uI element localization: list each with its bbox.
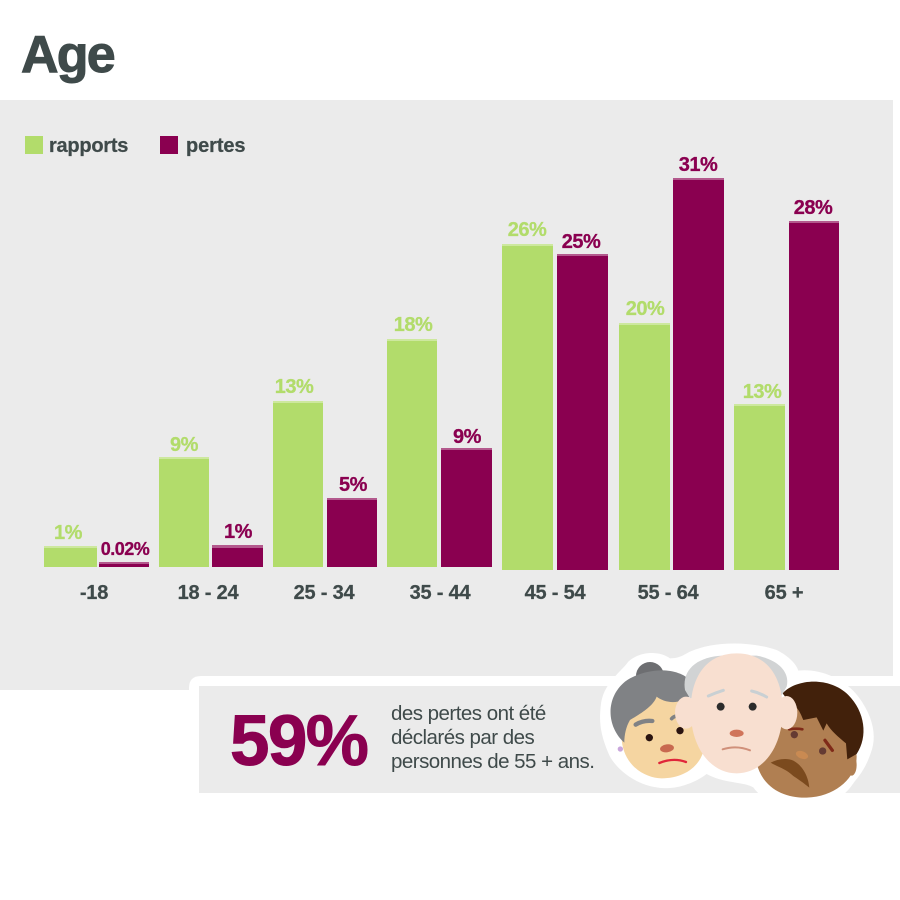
title: Age bbox=[21, 26, 115, 84]
group: 35-44: 9% bbox=[453, 426, 482, 448]
callout panel bbox=[199, 686, 900, 793]
group: -18: 0.02% bbox=[101, 539, 150, 559]
white sticker outline bbox=[600, 643, 874, 809]
dark man face bbox=[756, 682, 864, 798]
group: 65+: 65 + bbox=[765, 582, 803, 604]
group: 18-24: 18 - 24 bbox=[178, 582, 240, 604]
group: 55-64: 55 - 64 bbox=[638, 582, 700, 604]
bald man face bbox=[675, 653, 797, 773]
group: 45-54: 45 - 54 bbox=[525, 582, 587, 604]
group: 45-54 bbox=[502, 219, 608, 604]
group: 25-34: 13% bbox=[275, 376, 314, 398]
woman face bbox=[611, 662, 705, 778]
callout text: personnes de 55 + ans. bbox=[391, 750, 594, 773]
legend: pertes: pertes bbox=[186, 135, 245, 157]
group: 18-24 bbox=[159, 434, 263, 604]
callout frame bbox=[189, 676, 900, 800]
legend: rapports: rapports bbox=[49, 135, 128, 157]
group: 65+: 13% bbox=[743, 381, 782, 403]
callout figure: 59% bbox=[230, 702, 368, 781]
bar chart bbox=[44, 154, 839, 604]
group: 55-64: 20% bbox=[626, 298, 665, 320]
group: -18 bbox=[44, 522, 150, 604]
group: 55-64 bbox=[619, 154, 724, 604]
group: 18-24: 1% bbox=[224, 521, 253, 543]
group: 45-54: 25% bbox=[562, 231, 601, 253]
group: -18: 1% bbox=[54, 522, 83, 544]
callout text: déclarés par des bbox=[391, 726, 535, 749]
icon: three sad elderly faces bbox=[600, 643, 874, 809]
callout text bbox=[391, 702, 594, 773]
group: 35-44: 18% bbox=[394, 314, 433, 336]
legend: pertes bbox=[160, 135, 245, 157]
group: 45-54: 26% bbox=[508, 219, 547, 241]
legend bbox=[25, 135, 245, 157]
group: 25-34: 5% bbox=[339, 474, 368, 496]
group: 25-34 bbox=[273, 376, 377, 604]
callout text: des pertes ont été bbox=[391, 702, 546, 725]
panel: chart background bbox=[0, 100, 893, 690]
group: 55-64: 31% bbox=[679, 154, 718, 176]
group: 65+ bbox=[734, 197, 839, 604]
group: 18-24: 9% bbox=[170, 434, 199, 456]
group: 35-44: 35 - 44 bbox=[410, 582, 472, 604]
group: 65+: 28% bbox=[794, 197, 833, 219]
group: 25-34: 25 - 34 bbox=[294, 582, 356, 604]
group: -18: -18 bbox=[80, 582, 108, 604]
group: 35-44 bbox=[387, 314, 492, 604]
